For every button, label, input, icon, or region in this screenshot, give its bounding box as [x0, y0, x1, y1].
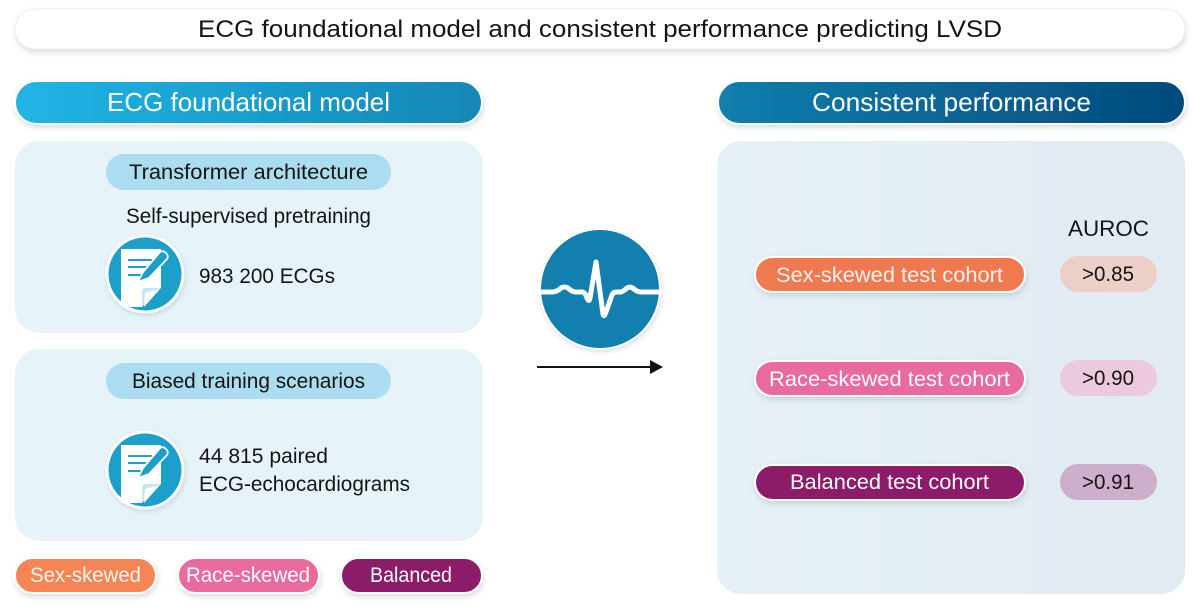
legend pill: Race-skewed [178, 558, 319, 593]
icon: ECG heartbeat circle [539, 228, 661, 350]
AUROC value 0.85: >0.85 [1082, 263, 1134, 286]
AUROC value 0.90 [1060, 360, 1157, 396]
row: balanced test cohort: Balanced test cohort [790, 471, 989, 494]
title: ECG foundational model and consistent performance predicting LVSD [198, 16, 1002, 43]
panel: Biased training scenarios [15, 349, 483, 541]
text: paired ECG-echocardiograms [199, 445, 410, 496]
panel: Transformer architecture [15, 141, 483, 333]
legend pill: Sex-skewed: Sex-skewed [30, 564, 141, 587]
panel: Consistent performance [717, 141, 1185, 594]
row: race-skewed test cohort [755, 360, 1157, 396]
legend pill: Race-skewed: Race-skewed [186, 564, 310, 587]
label pill: Biased training scenarios: Biased training scenarios [132, 370, 365, 393]
legend pill: Balanced [341, 558, 482, 593]
text: self-supervised pretraining: Self-supervised pretraining [126, 205, 371, 228]
icon: document and pen [106, 430, 184, 510]
AUROC value 0.85 [1060, 256, 1157, 292]
AUROC value 0.91 [1060, 464, 1157, 500]
label pill: Transformer architecture [106, 154, 391, 190]
column heading: AUROC: AUROC [1068, 216, 1149, 241]
heading: Consistent performance: Consistent performance [812, 87, 1091, 117]
label pill: Biased training scenarios [106, 363, 391, 399]
label pill: Transformer architecture: Transformer architecture [129, 161, 368, 184]
heading: ECG foundational model: ECG foundational model [107, 87, 390, 117]
text: paired ECG-echocardiograms: 44 815 paired [199, 445, 328, 468]
arrow [537, 360, 663, 374]
heading: ECG foundational model [15, 81, 482, 124]
heading: Consistent performance [718, 81, 1185, 124]
text: paired ECG-echocardiograms: ECG-echocardiograms [199, 473, 410, 496]
row: sex-skewed test cohort: Sex-skewed test cohort [776, 264, 1003, 287]
legend pill: Balanced: Balanced [370, 564, 452, 587]
AUROC value 0.90: >0.90 [1082, 367, 1134, 390]
row: race-skewed test cohort: Race-skewed test cohort [769, 368, 1010, 391]
legend pill: Sex-skewed [15, 558, 156, 593]
row: balanced test cohort [755, 464, 1157, 500]
title [15, 9, 1185, 49]
icon: document and pen [106, 234, 184, 314]
row: sex-skewed test cohort [755, 256, 1157, 292]
text: ECG count: 983 200 ECGs [199, 265, 335, 288]
AUROC value 0.91: >0.91 [1082, 471, 1134, 494]
legend: training scenarios [15, 558, 482, 593]
